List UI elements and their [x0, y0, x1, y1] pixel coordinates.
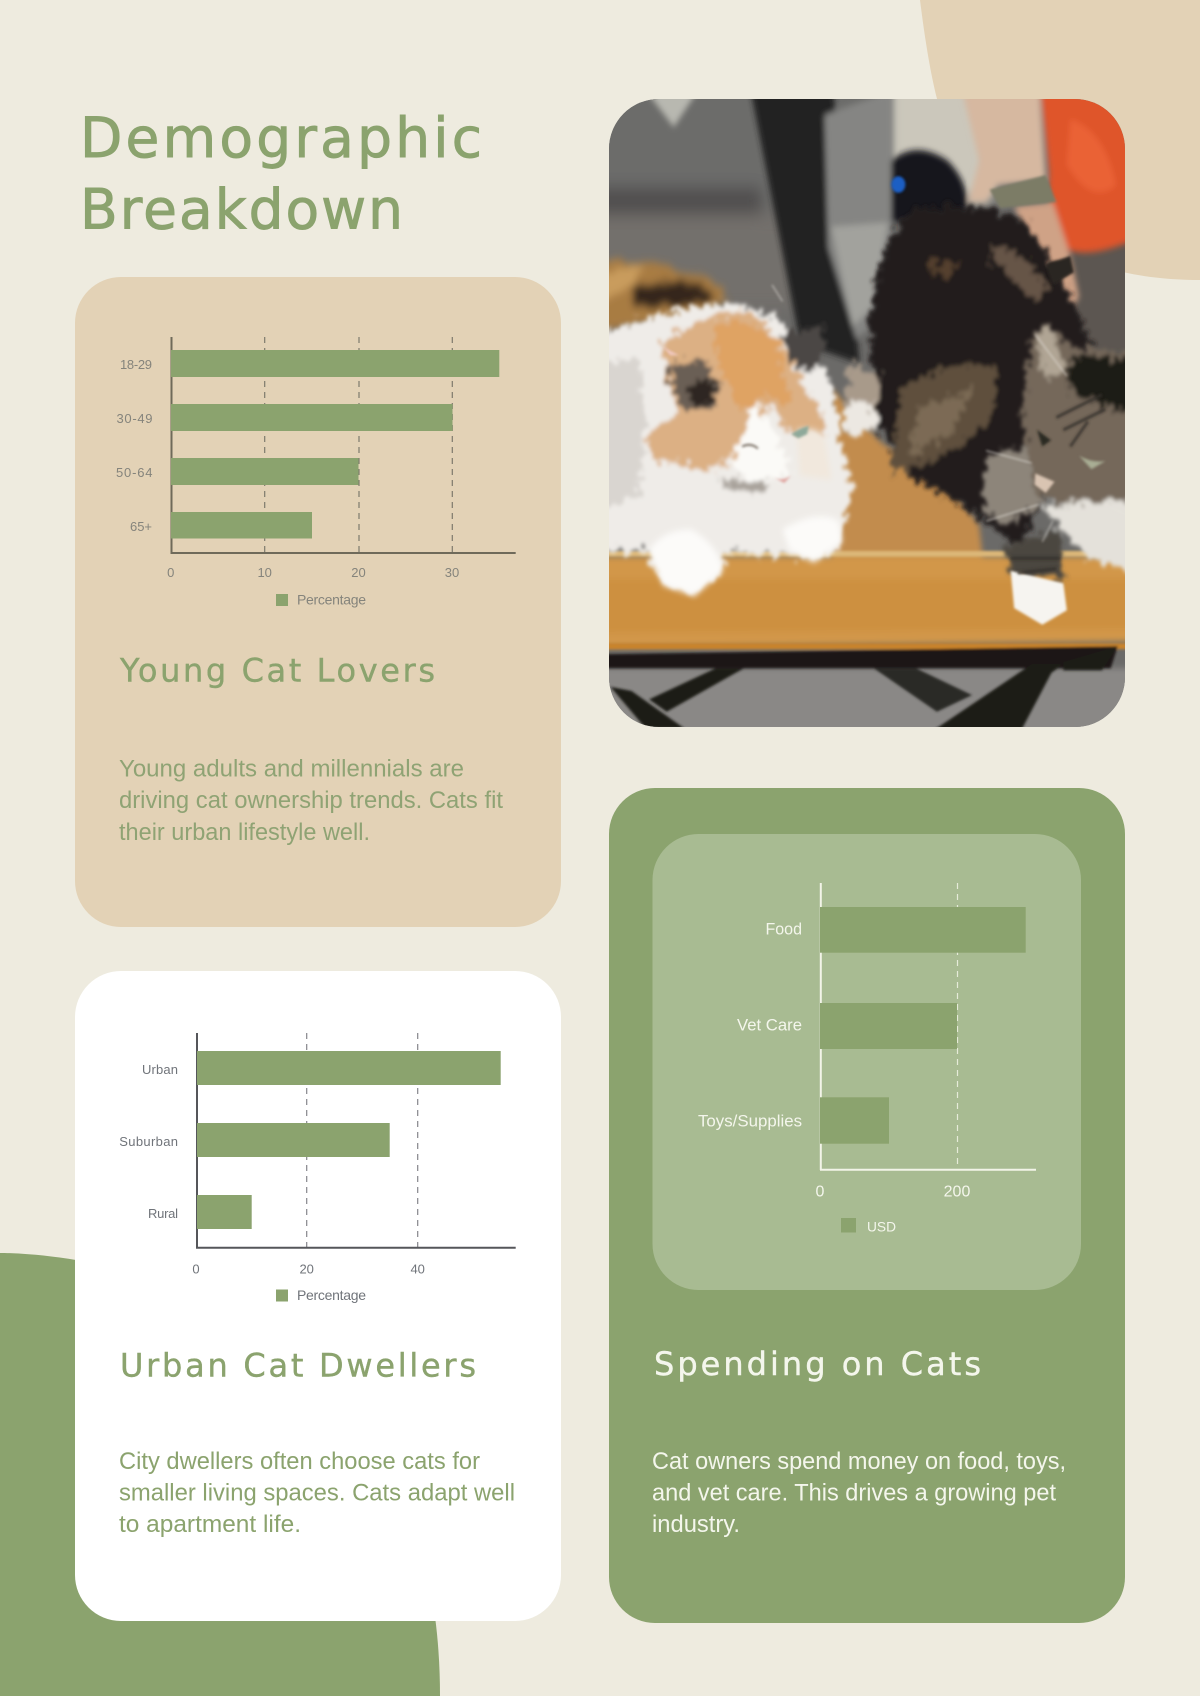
bar chart: age groups: 30 — [445, 565, 459, 580]
bar chart: age groups: 10 — [257, 565, 272, 580]
body text: Young adults and millennials are — [119, 756, 464, 783]
decorative blob: bottom left — [0, 1253, 440, 1696]
bar chart: age groups — [116, 337, 516, 608]
bar chart: age groups: 30-49 — [116, 411, 152, 426]
body text: and vet care. This drives a growing pet — [652, 1480, 1056, 1507]
body text — [119, 756, 503, 846]
legend: Percentage — [297, 1287, 366, 1303]
calico cat — [609, 254, 729, 331]
body text: to apartment life. — [119, 1511, 301, 1538]
photo: two long-haired cats on a leather bench — [609, 99, 1125, 727]
bar chart: location: Suburban — [119, 1134, 178, 1149]
bar chart: spending: Toys/Supplies — [698, 1112, 802, 1130]
title: Breakdown — [80, 178, 403, 242]
bar chart: spending: Food — [766, 920, 802, 938]
body text: smaller living spaces. Cats adapt well — [119, 1480, 515, 1507]
heading: Urban Cat Dwellers — [120, 1346, 476, 1384]
heading: Young Cat Lovers — [119, 652, 435, 690]
body text: driving cat ownership trends. Cats fit — [119, 787, 503, 814]
bench edge, frame and legs — [609, 549, 1125, 727]
bar chart: spending: 200 — [944, 1184, 970, 1200]
bar chart: location — [119, 1033, 516, 1303]
bar chart: age groups: 20 — [351, 565, 366, 580]
decorative blob: top right — [920, 0, 1200, 280]
legend: Percentage — [297, 592, 366, 608]
panel: urban cat dwellers — [75, 971, 561, 1621]
bar chart: age groups: 50-64 — [116, 465, 152, 480]
bar chart: location: Rural — [148, 1206, 178, 1221]
inner chart card — [652, 834, 1081, 1290]
dark cat — [842, 206, 1091, 550]
bar chart: location: 0 — [192, 1262, 200, 1276]
bench seat top — [832, 388, 983, 558]
fine details — [663, 175, 1130, 573]
heading: Spending on Cats — [654, 1345, 981, 1383]
bar chart: age groups: 65+ — [130, 519, 152, 534]
tabby head, chest and paw — [978, 321, 1125, 584]
title: Demographic — [80, 106, 482, 170]
body text: Cat owners spend money on food, toys, — [652, 1448, 1066, 1475]
title — [80, 106, 482, 242]
bar chart: location: Urban — [142, 1062, 178, 1077]
body text: City dwellers often choose cats for — [119, 1448, 480, 1475]
bar chart: spending — [698, 883, 1036, 1234]
panel: spending on cats — [609, 788, 1125, 1623]
legend: USD — [867, 1218, 896, 1234]
bar chart: location: 40 — [410, 1262, 425, 1276]
background shapes — [609, 99, 1125, 355]
panel: young cat lovers — [75, 277, 561, 927]
bar chart: location: 20 — [299, 1262, 314, 1276]
legend — [841, 1218, 896, 1234]
bar chart: spending: 0 — [816, 1184, 825, 1200]
bar chart: age groups: 0 — [167, 565, 174, 580]
bar chart: age groups: 18-29 — [120, 357, 152, 372]
body text: industry. — [652, 1511, 740, 1538]
body text: their urban lifestyle well. — [119, 819, 370, 846]
body text — [119, 1448, 515, 1538]
bar chart: spending: Vet Care — [737, 1016, 802, 1034]
body text — [652, 1448, 1066, 1538]
